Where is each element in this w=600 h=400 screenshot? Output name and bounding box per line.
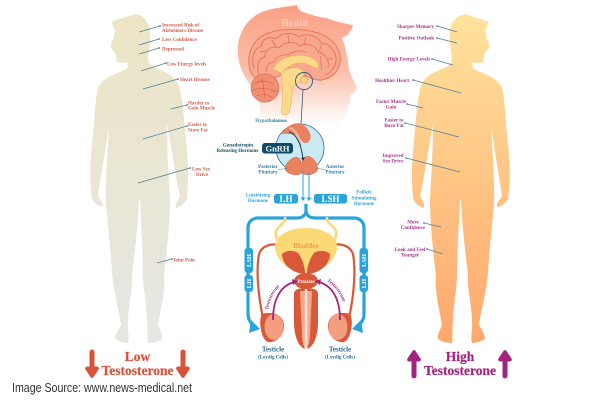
panel: low testosterone symptoms: Low Sex bbox=[192, 168, 211, 172]
hypothalamus label: Hypothalamus bbox=[255, 119, 287, 124]
posterior pituitary label: Posterior bbox=[258, 165, 278, 170]
magnifier connector bbox=[301, 90, 303, 124]
LH pill left: LH bbox=[246, 279, 253, 288]
panel: low testosterone symptoms: Harder to bbox=[188, 101, 210, 106]
high testosterone body silhouette bbox=[412, 14, 510, 343]
panel: low testosterone symptoms: Increased Risk of bbox=[162, 24, 199, 28]
panel: high testosterone benefits: Easier to bbox=[385, 118, 404, 124]
pituitary diagram bbox=[223, 119, 326, 175]
panel: low testosterone symptoms: Low Energy levels bbox=[167, 62, 206, 68]
GnRH badge: GnRH bbox=[265, 144, 290, 154]
panel: low testosterone symptoms: Alzheimers Disease bbox=[162, 29, 204, 34]
bladder bbox=[275, 228, 337, 274]
testosterone arrows bbox=[273, 282, 340, 320]
reproductive anatomy: Testosterone bbox=[328, 278, 345, 302]
panel: high testosterone benefits: Confidence bbox=[401, 226, 426, 231]
corpus callosum and brain stem bbox=[273, 55, 319, 73]
testicle label left: Testicle bbox=[262, 346, 284, 354]
arrows from pituitary bbox=[300, 172, 312, 201]
cerebellum bbox=[251, 74, 279, 102]
panel: low testosterone symptoms: Heart Disease bbox=[180, 78, 210, 83]
panel: low testosterone symptoms: Easier to bbox=[188, 123, 207, 128]
panel: low testosterone symptoms bbox=[138, 24, 216, 264]
testosterone text right bbox=[327, 281, 345, 310]
testicle label right: Testicle bbox=[329, 346, 351, 354]
LH badge: LH bbox=[279, 194, 293, 204]
panel: high testosterone benefits: Positive Outlook bbox=[399, 36, 434, 42]
LSH badge: LSH bbox=[321, 194, 340, 204]
panel: low testosterone symptoms: Depressed bbox=[162, 48, 184, 52]
releasing hormone label: Releasing Hormone bbox=[216, 149, 259, 154]
panel: low testosterone symptoms: Joint Pain bbox=[173, 258, 195, 264]
LH pill right: LH bbox=[361, 279, 368, 288]
bladder label: Bladder bbox=[293, 241, 320, 250]
follicle stimulating hormone label: Hormone bbox=[354, 202, 375, 207]
anterior pituitary label: Anterior bbox=[326, 165, 344, 170]
testosterone text left bbox=[268, 281, 286, 310]
penis bbox=[294, 288, 318, 349]
anterior pituitary label: Pituitary bbox=[325, 170, 345, 176]
panel: high testosterone benefits: Burn Fat bbox=[384, 124, 404, 129]
panel: high testosterone benefits: Faster Muscle bbox=[376, 100, 407, 105]
panel: high testosterone benefits: Improved bbox=[382, 154, 404, 159]
panel: high testosterone benefits bbox=[375, 25, 461, 258]
panel: low testosterone symptoms: Store Fat bbox=[188, 128, 208, 134]
panel: high testosterone benefits: More bbox=[407, 220, 420, 226]
seminal vesicles bbox=[282, 251, 330, 274]
testicle right bbox=[328, 313, 352, 342]
testicle left bbox=[260, 313, 284, 342]
LSH badge bbox=[314, 194, 347, 204]
icon: up arrow right bbox=[498, 350, 512, 379]
follicle stimulating hormone label: Stimulating bbox=[351, 196, 377, 201]
vas deferens bbox=[258, 244, 354, 318]
cerebrum bbox=[249, 29, 340, 81]
image source caption: Image Source: www.news-medical.net bbox=[12, 381, 192, 395]
panel: low testosterone symptoms: Less Confidence bbox=[162, 38, 198, 43]
reproductive anatomy bbox=[256, 216, 356, 349]
panel: high testosterone benefits: High Energy Levels bbox=[388, 58, 430, 62]
panel: low testosterone symptoms: Drive bbox=[196, 173, 209, 178]
high testosterone heading: High bbox=[446, 349, 474, 364]
magnifier circle bbox=[296, 72, 312, 90]
LSH pill right: LSH bbox=[361, 254, 368, 267]
testicle label left: (Leydig Cells) bbox=[258, 356, 288, 360]
panel: high testosterone benefits: Gain bbox=[386, 106, 396, 110]
LSH pill left: LSH bbox=[246, 254, 253, 267]
testicle label right: (Leydig Cells) bbox=[325, 356, 355, 360]
luteinizing hormone label: Luteinizing bbox=[246, 194, 270, 198]
hormone flow arrows bbox=[244, 204, 368, 333]
posterior pituitary label: Pituitary bbox=[258, 170, 278, 176]
low testosterone body silhouette bbox=[90, 14, 188, 343]
ureters bbox=[276, 217, 336, 243]
panel: high testosterone benefits: Younger bbox=[401, 254, 420, 258]
luteinizing hormone label: Hormone bbox=[248, 199, 269, 204]
icon: up arrow left bbox=[407, 350, 421, 379]
brain label: Brain bbox=[282, 17, 308, 29]
gonadotropin label: Gonadotropin bbox=[223, 144, 253, 148]
low testosterone heading: Low bbox=[125, 349, 150, 364]
panel: high testosterone benefits: Healthier Heart bbox=[375, 79, 409, 84]
panel: low testosterone symptoms: Gain Muscle bbox=[188, 107, 216, 112]
brain diagram bbox=[249, 17, 340, 115]
panel: high testosterone benefits: Look and Feel bbox=[395, 248, 426, 253]
reproductive anatomy: Testosterone bbox=[264, 285, 280, 310]
icon: down arrow right bbox=[176, 350, 190, 378]
prostate: Prostate bbox=[298, 280, 314, 285]
panel: high testosterone benefits: Sharper Memory bbox=[397, 25, 434, 30]
head silhouette bbox=[238, 5, 357, 125]
icon: down arrow left bbox=[85, 350, 99, 378]
LH badge bbox=[274, 194, 298, 204]
high testosterone heading: Testosterone bbox=[424, 363, 496, 378]
low testosterone heading: Testosterone bbox=[102, 363, 174, 378]
panel: high testosterone benefits: Sex Drive bbox=[383, 160, 404, 164]
follicle stimulating hormone label: Follicle bbox=[356, 190, 372, 196]
